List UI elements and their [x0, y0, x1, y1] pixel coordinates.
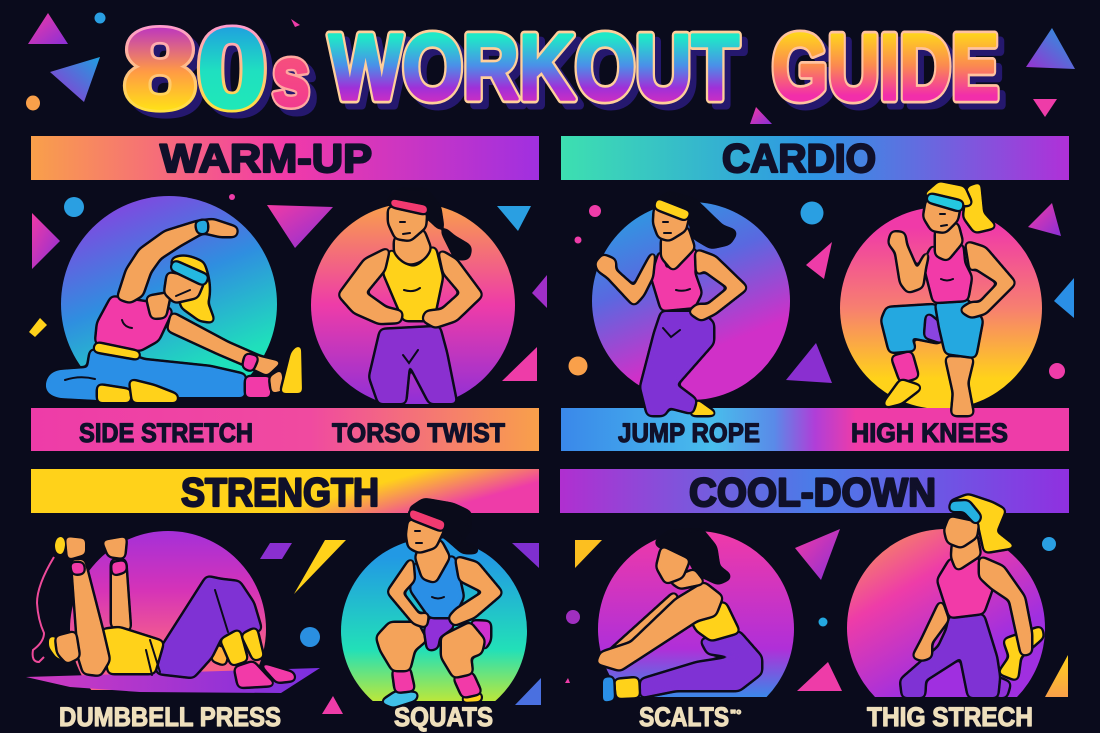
cool-down confetti — [565, 529, 1068, 697]
strength heading bar: STRENGTH — [181, 471, 379, 515]
figure: torso twist — [339, 190, 482, 403]
strength heading bar — [31, 469, 539, 515]
strength exercise labels: DUMBBELL PRESS — [59, 702, 281, 732]
strength gradient circle 2 — [341, 538, 527, 701]
figure: squats — [377, 500, 502, 707]
cardio exercise labels: HIGH KNEES — [851, 418, 1008, 448]
panel: cool-down — [560, 469, 1069, 732]
cardio gradient circle 2 — [840, 207, 1042, 409]
warm-up exercise labels: TORSO TWIST — [332, 418, 505, 448]
strength confetti — [260, 540, 541, 714]
figure: thigh stretch — [901, 495, 1043, 697]
title — [124, 7, 1005, 137]
cool-down exercise labels — [639, 702, 1033, 732]
title: 0 — [197, 7, 267, 131]
warm-up exercise labels: SIDE STRETCH — [79, 418, 253, 448]
cool-down gradient circle 2 — [847, 529, 1045, 697]
cardio confetti — [568, 202, 1074, 383]
title: 8 — [124, 7, 196, 131]
cardio gradient circle 1 — [592, 202, 790, 400]
warm-up heading bar — [31, 136, 539, 181]
figure: high knees — [882, 182, 1015, 415]
title: 0 — [203, 13, 273, 137]
warm-up gradient circle 2 — [311, 203, 515, 407]
strength exercise labels: SQUATS — [394, 702, 493, 732]
figure: dumbbell press — [26, 537, 320, 693]
panel: strength — [26, 469, 541, 732]
cool-down exercise labels: "° — [730, 707, 741, 722]
cardio exercise labels — [561, 408, 1069, 451]
cool-down heading bar — [560, 469, 1069, 515]
strength exercise labels — [59, 702, 493, 732]
figure: jump rope — [596, 193, 747, 415]
title confetti shapes — [26, 12, 1075, 124]
title: GUIDE — [772, 15, 999, 119]
strength gradient circle 1 — [70, 531, 266, 690]
title: s — [278, 35, 316, 129]
panel: cardio — [561, 136, 1074, 451]
cool-down exercise labels: SCALTS — [639, 702, 729, 732]
cool-down exercise labels: THIG STRECH — [867, 702, 1033, 732]
title: 0 — [197, 7, 267, 131]
cardio heading bar — [561, 136, 1069, 181]
title: s — [272, 29, 310, 123]
cool-down heading bar: COOL-DOWN — [689, 471, 936, 515]
cool-down gradient circle 1 — [598, 531, 794, 697]
warm-up gradient circle 1 — [61, 196, 277, 376]
title: 8 — [124, 7, 196, 131]
figure: seated stretch — [597, 530, 761, 702]
title: 8 — [130, 13, 202, 137]
title: WORKOUT — [329, 15, 739, 119]
title: WORKOUT — [335, 21, 745, 125]
cardio exercise labels: JUMP ROPE — [618, 418, 760, 448]
title: s — [272, 29, 310, 123]
panel: warm-up — [29, 136, 547, 451]
cardio heading bar: CARDIO — [722, 137, 876, 181]
warm-up exercise labels — [31, 408, 539, 451]
figure: side stretch — [46, 220, 302, 402]
warm-up heading bar: WARM-UP — [160, 137, 372, 181]
title: GUIDE — [778, 21, 1005, 125]
warm-up confetti — [29, 194, 547, 381]
title: GUIDE — [772, 15, 999, 119]
title: WORKOUT — [329, 15, 739, 119]
